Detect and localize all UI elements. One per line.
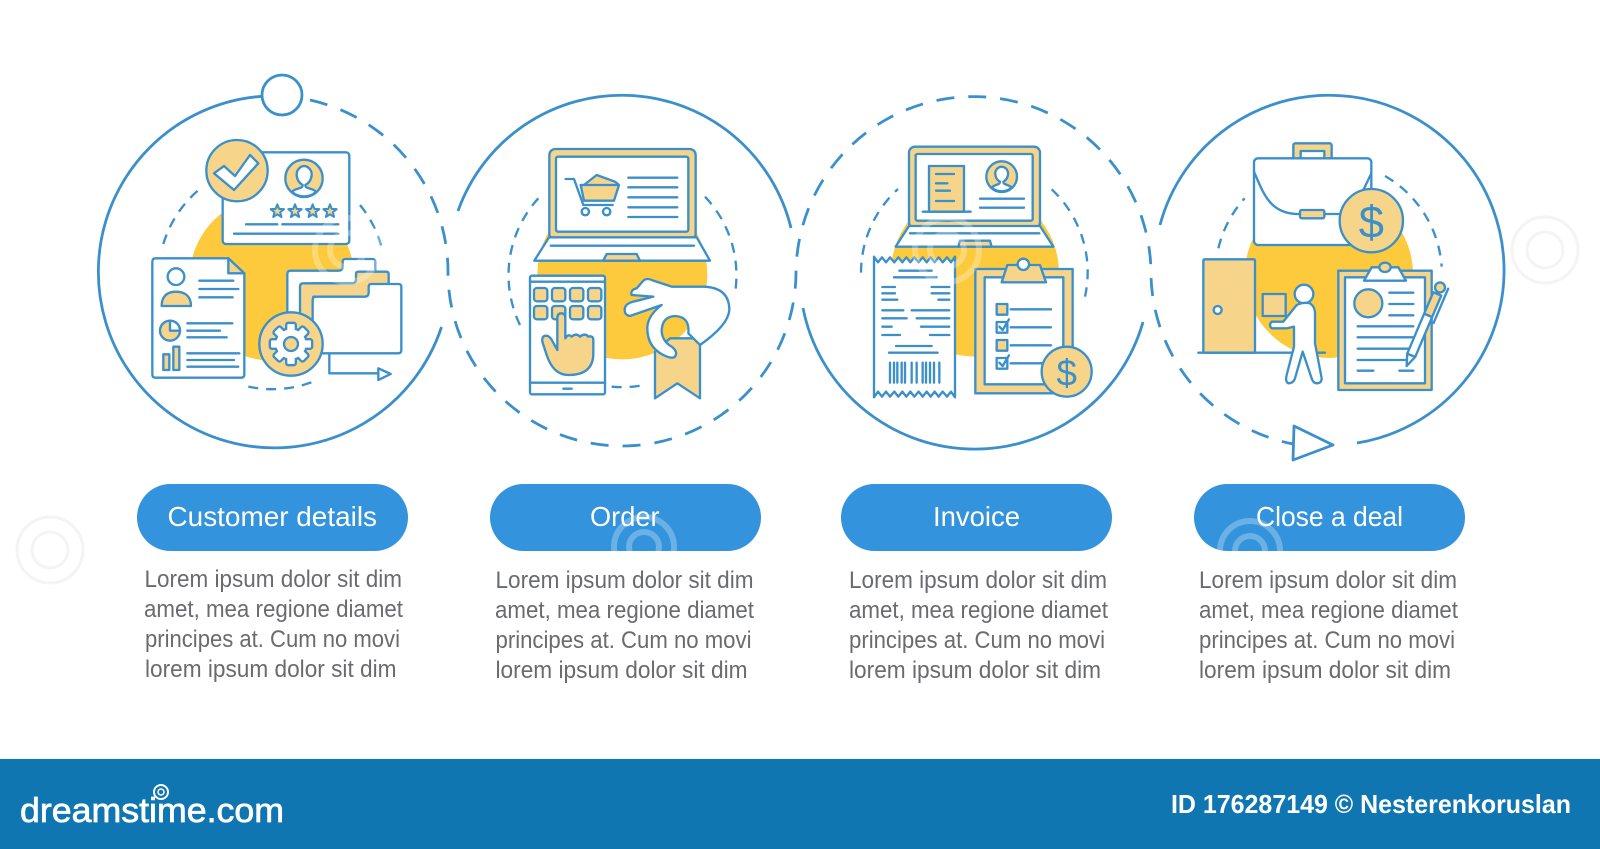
text block: invoice	[849, 567, 1108, 684]
icon: laptop with contact details	[896, 147, 1053, 247]
icon: laptop with shopping cart	[534, 149, 710, 261]
text block: customer details: amet, mea regione diamet	[144, 596, 403, 623]
text block: order: Lorem ipsum dolor sit dim	[496, 567, 754, 594]
footer logo: dreamstime.com	[20, 792, 284, 830]
footer credit: ID 176287149 © Nesterenkoruslan	[1171, 789, 1571, 819]
text block: invoice: principes at. Cum no movi	[849, 627, 1105, 654]
text block: order: principes at. Cum no movi	[496, 627, 752, 654]
icon: settings gear	[259, 312, 323, 376]
text block: close a deal	[1199, 567, 1458, 684]
icon: pen	[1402, 281, 1449, 369]
text block: close a deal: principes at. Cum no movi	[1199, 627, 1455, 654]
text block: order: lorem ipsum dolor sit dim	[496, 657, 748, 684]
icon: briefcase	[1254, 143, 1371, 245]
icon: hand holding ribbon	[625, 279, 729, 358]
step 3: invoice	[841, 484, 1112, 684]
pill: order: Order	[590, 501, 660, 532]
text block: close a deal: lorem ipsum dolor sit dim	[1199, 657, 1451, 684]
end marker arrow triangle	[1293, 426, 1333, 460]
timeline ring: connected solid and dashed circles	[98, 95, 1504, 449]
text block: customer details: lorem ipsum dolor sit dim	[145, 656, 396, 683]
icon: door	[1198, 259, 1325, 353]
text block: customer details: Lorem ipsum dolor sit dim	[144, 566, 402, 593]
icon: tablet with touching hand	[530, 276, 605, 394]
footer bar	[0, 759, 1600, 849]
icon: clipboard checklist	[975, 259, 1073, 393]
icon: check badge	[206, 140, 268, 201]
pill: invoice	[841, 484, 1112, 551]
watermarks	[17, 217, 1578, 583]
pill: customer details	[137, 484, 408, 551]
text block: order	[495, 567, 754, 684]
step 1: customer details	[137, 484, 408, 683]
icon: bookmark ribbon	[655, 338, 700, 398]
icon: dollar coin	[1340, 189, 1403, 252]
icon: dollar coin: $	[1359, 196, 1384, 247]
pill: close a deal	[1194, 484, 1465, 581]
text block: close a deal: Lorem ipsum dolor sit dim	[1199, 567, 1457, 594]
text block: invoice: Lorem ipsum dolor sit dim	[849, 567, 1107, 594]
text block: order: amet, mea regione diamet	[495, 597, 754, 624]
pill: customer details: Customer details	[168, 501, 377, 532]
icon: clipboard contract	[1338, 263, 1432, 390]
text block: customer details: principes at. Cum no movi	[145, 626, 400, 653]
icon: folders	[287, 259, 401, 380]
icon: person carrying box	[1263, 285, 1322, 383]
pill: close a deal: Close a deal	[1256, 501, 1403, 532]
icon group: customer details	[152, 140, 401, 389]
step 4: close a deal	[1194, 484, 1465, 684]
step 2: order	[490, 484, 761, 684]
icon: profile card with stars	[223, 152, 349, 244]
pill: invoice: Invoice	[933, 501, 1020, 532]
text block: close a deal: amet, mea regione diamet	[1199, 597, 1458, 624]
text block: invoice: lorem ipsum dolor sit dim	[849, 657, 1101, 684]
start marker circle	[262, 75, 302, 115]
icon: dollar coin: $	[1056, 352, 1077, 393]
icon: receipt with barcode	[874, 257, 955, 397]
pill: order	[490, 484, 761, 577]
icon: dollar coin	[1042, 347, 1092, 397]
icon group: invoice	[861, 147, 1092, 397]
text block: invoice: amet, mea regione diamet	[849, 597, 1108, 624]
icon group: order	[509, 149, 736, 398]
icon: document with charts	[152, 258, 244, 378]
text block: customer details	[144, 566, 403, 683]
icon group: close a deal	[1198, 143, 1449, 390]
